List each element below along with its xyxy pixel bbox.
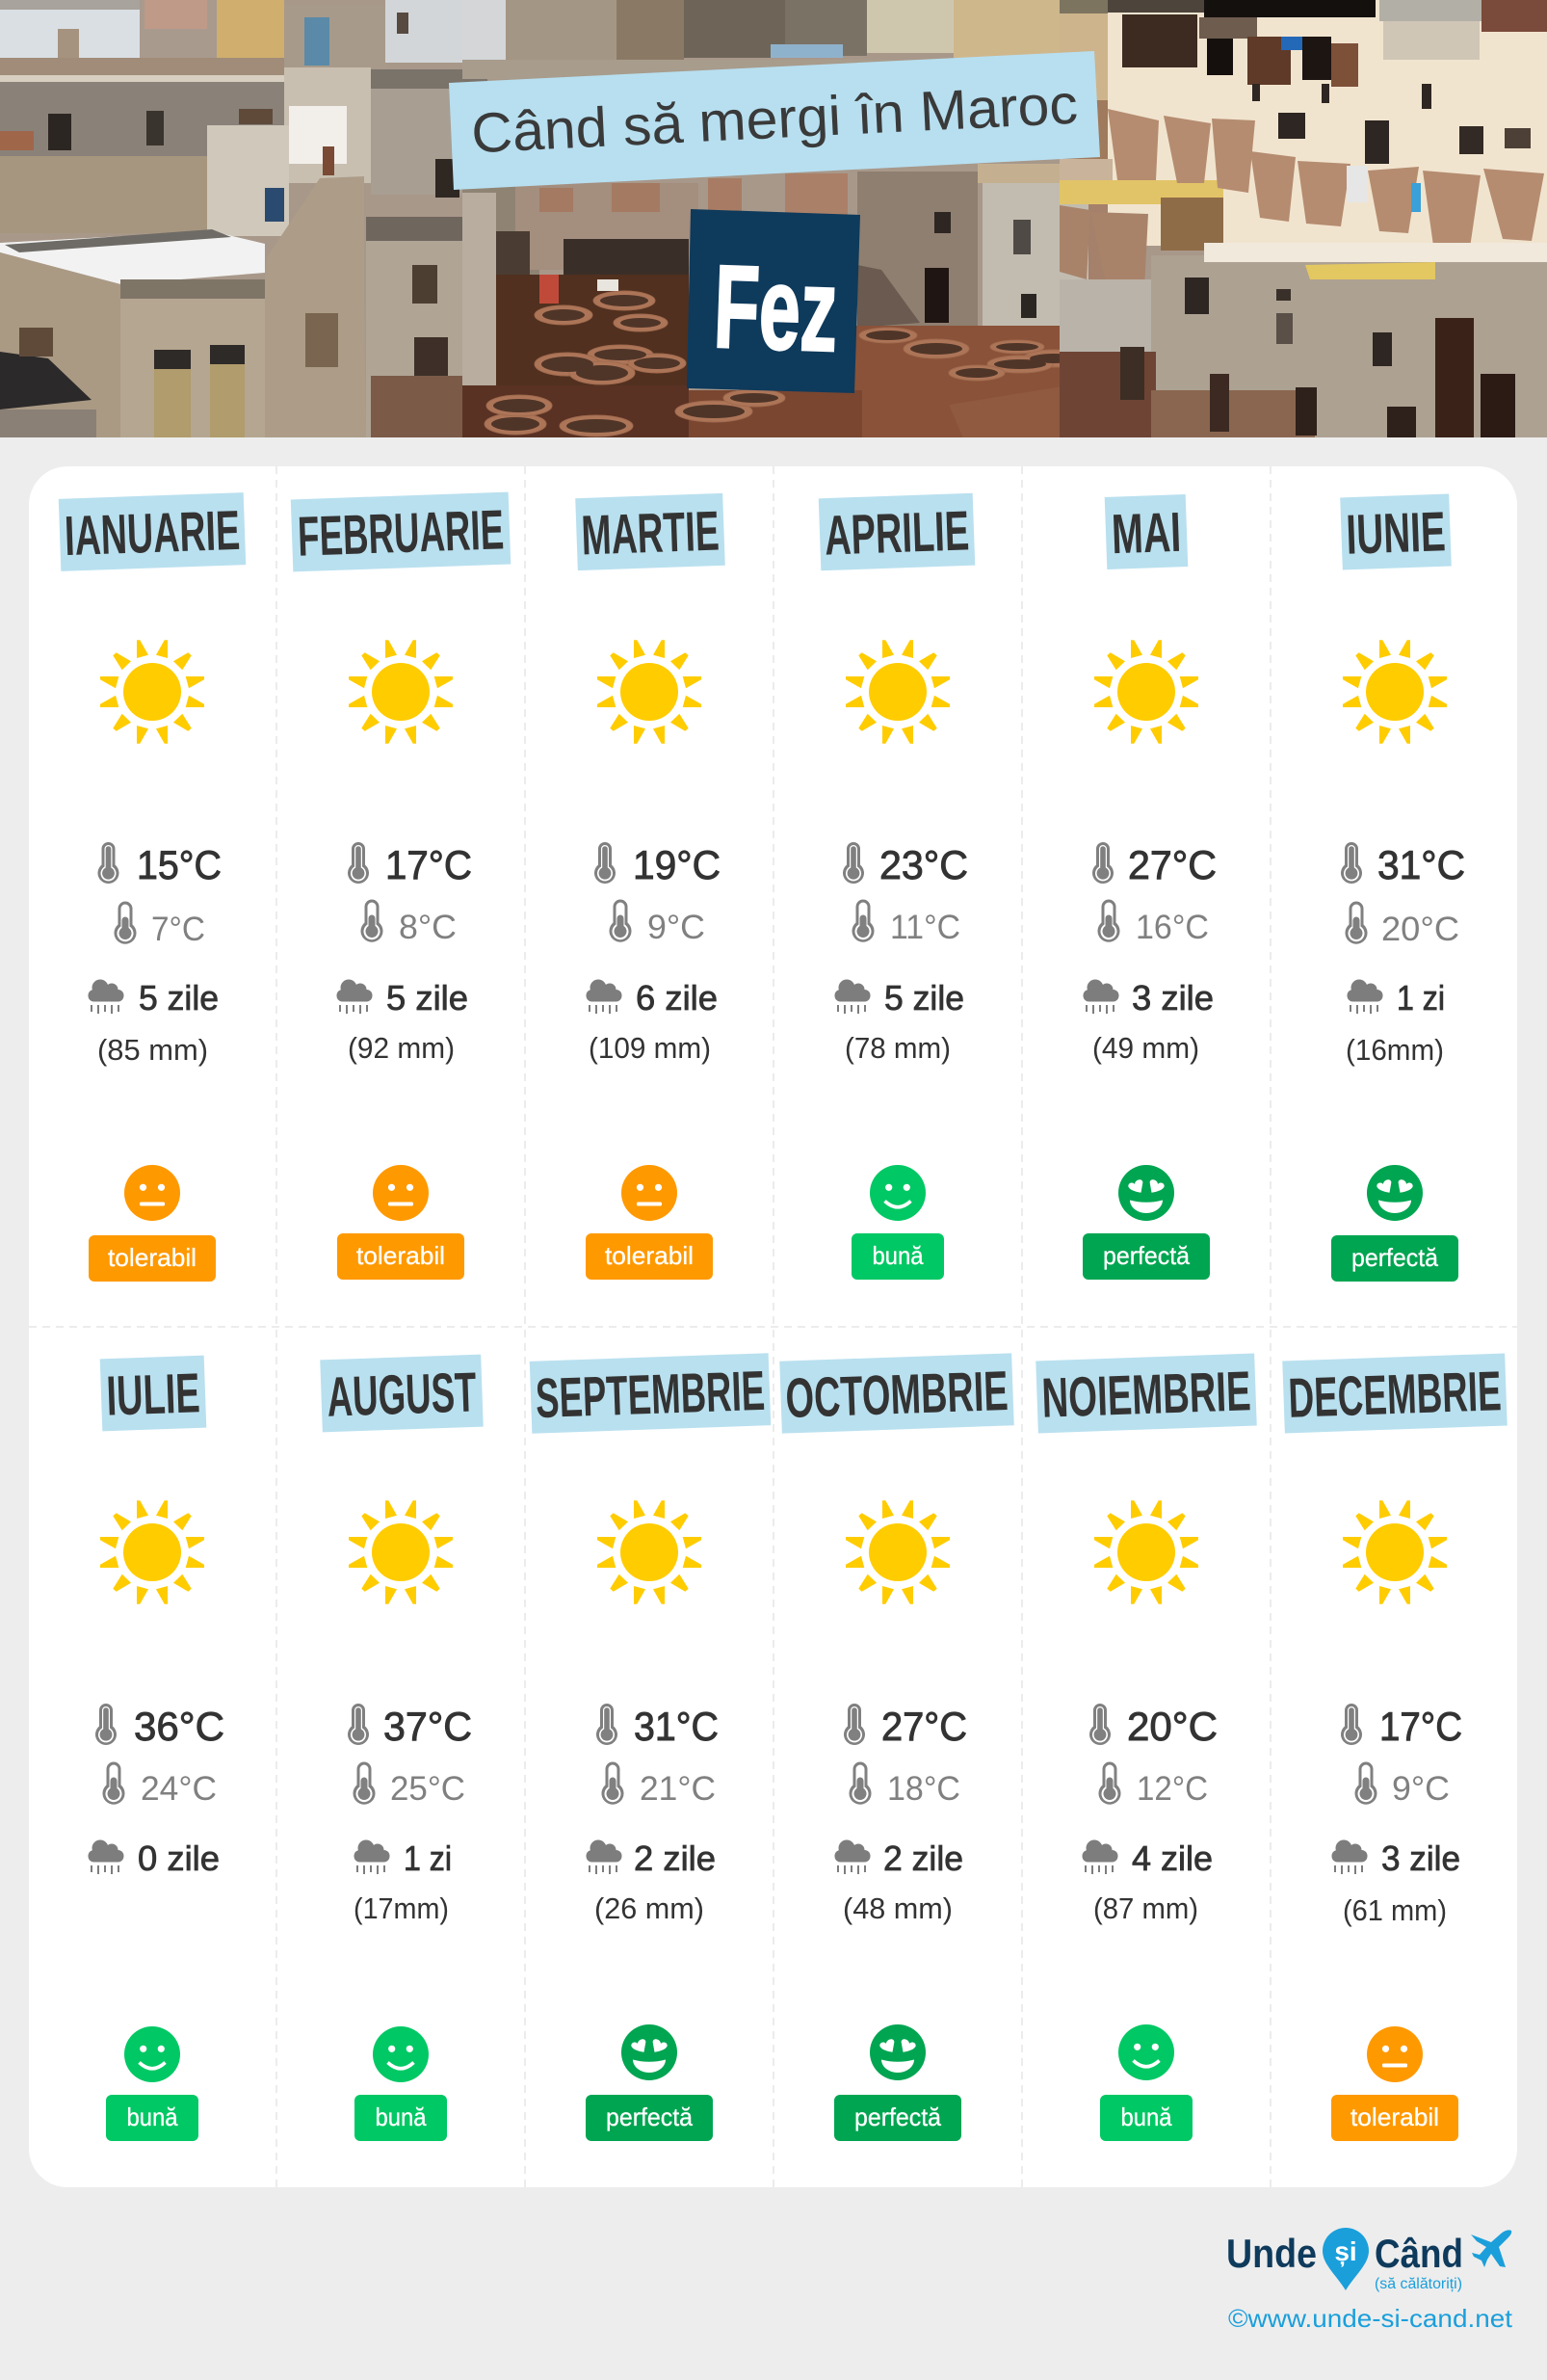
icon: thermometer max xyxy=(1092,842,1114,884)
rainfall: (26 mm) xyxy=(594,1891,704,1925)
icon: smile face xyxy=(870,1165,926,1221)
heading: MARTIE xyxy=(580,500,721,567)
icon: neutral face xyxy=(124,1165,180,1221)
rating badge xyxy=(586,1233,713,1280)
min temperature: 11°C xyxy=(890,909,960,946)
heading xyxy=(1105,494,1188,569)
max temperature: 37°C xyxy=(383,1704,472,1749)
website url: ©www.unde-si-cand.net xyxy=(1228,2304,1513,2333)
max temperature: 27°C xyxy=(1128,842,1217,887)
icon: sun xyxy=(1094,640,1198,744)
icon: sun xyxy=(100,1500,204,1604)
icon: thermometer max xyxy=(98,842,119,884)
photo right: hanging hides xyxy=(1060,0,1547,438)
heading xyxy=(1036,1354,1257,1433)
max temperature: 19°C xyxy=(633,842,721,887)
photo middle: dye vats xyxy=(462,0,1108,438)
icon: sun xyxy=(1094,1500,1198,1604)
rainy days: 5 zile xyxy=(884,978,964,1018)
icon: sun xyxy=(1343,640,1447,744)
icon: airplane xyxy=(1471,2230,1511,2267)
month: septembrie xyxy=(530,1353,771,2141)
icon: thermometer min xyxy=(1345,902,1368,944)
rating badge xyxy=(337,1233,464,1280)
icon: rain xyxy=(89,1840,123,1874)
month: iunie xyxy=(1331,494,1465,1282)
city label: Fez xyxy=(687,209,860,393)
month: noiembrie xyxy=(1036,1354,1257,2141)
city label: Fez: Fez xyxy=(712,241,840,376)
icon: thermometer min xyxy=(852,900,875,942)
heading: NOIEMBRIE xyxy=(1040,1360,1252,1430)
rating badge: tolerabil xyxy=(1350,2102,1439,2131)
rating badge xyxy=(106,2095,198,2141)
icon: rain xyxy=(586,979,622,1014)
month: iulie xyxy=(89,1356,224,2141)
logo word: Unde: Unde xyxy=(1226,2231,1317,2276)
photo: Fez tanneries xyxy=(0,0,1547,438)
rating badge: tolerabil xyxy=(108,1243,197,1272)
icon: thermometer max xyxy=(843,842,864,884)
icon: thermometer max xyxy=(844,1704,865,1745)
heading: SEPTEMBRIE xyxy=(535,1360,766,1430)
rainfall: (109 mm) xyxy=(589,1031,711,1065)
icon: smile face xyxy=(1118,2024,1174,2080)
rating badge: perfectă xyxy=(606,2102,694,2131)
icon: thermometer max xyxy=(1089,1704,1111,1745)
max temperature: 17°C xyxy=(1379,1704,1462,1749)
max temperature: 31°C xyxy=(634,1704,719,1749)
max temperature: 20°C xyxy=(1127,1704,1218,1749)
month: octombrie xyxy=(779,1353,1014,2141)
icon: thermometer max xyxy=(348,842,369,884)
rating badge xyxy=(354,2095,447,2141)
heading xyxy=(575,493,725,570)
icon: sun xyxy=(100,640,204,744)
heading: IULIE xyxy=(105,1362,201,1428)
icon: thermometer min xyxy=(360,900,383,942)
max temperature: 31°C xyxy=(1377,842,1465,887)
rainy days: 3 zile xyxy=(1132,978,1214,1018)
min temperature: 9°C xyxy=(647,909,705,946)
icon: sun xyxy=(1343,1500,1447,1604)
icon: thermometer min xyxy=(1098,1761,1121,1805)
icon: love face xyxy=(1367,1165,1423,1221)
icon: thermometer min xyxy=(850,1761,871,1805)
icon: rain xyxy=(1347,979,1383,1014)
min temperature: 24°C xyxy=(141,1770,217,1808)
rating badge xyxy=(1331,1235,1458,1282)
heading xyxy=(100,1356,206,1431)
photo left buildings xyxy=(0,0,487,438)
rainfall: (17mm) xyxy=(354,1891,449,1925)
icon: smile face xyxy=(124,2026,180,2082)
min temperature: 8°C xyxy=(399,909,457,946)
icon: rain xyxy=(586,1840,622,1874)
icon: map pin with și: și xyxy=(1334,2236,1357,2266)
rainfall: (78 mm) xyxy=(845,1031,951,1065)
icon: thermometer max xyxy=(348,1704,369,1745)
icon: thermometer min xyxy=(609,900,632,942)
month: mai xyxy=(1083,494,1217,1280)
logo: Unde și Când xyxy=(1226,2228,1511,2292)
icon: rain xyxy=(834,979,871,1014)
icon: thermometer min xyxy=(353,1761,376,1805)
icon: smile face xyxy=(373,2026,429,2082)
icon: rain xyxy=(1083,979,1119,1014)
icon: map pin with și xyxy=(1323,2228,1369,2290)
rating badge: perfectă xyxy=(1103,1241,1191,1270)
icon: love face xyxy=(1118,1165,1174,1221)
rainy days: 3 zile xyxy=(1381,1838,1460,1878)
heading xyxy=(291,492,511,571)
rainfall: (92 mm) xyxy=(348,1031,455,1065)
icon: sun xyxy=(846,1500,950,1604)
rating badge xyxy=(1083,1233,1210,1280)
heading: AUGUST xyxy=(326,1361,478,1429)
icon: sun xyxy=(349,1500,453,1604)
rating badge xyxy=(586,2095,713,2141)
max temperature: 23°C xyxy=(879,842,968,887)
rating badge: bună xyxy=(376,2102,427,2131)
max temperature: 15°C xyxy=(137,842,222,887)
heading xyxy=(530,1353,771,1434)
title banner: Când să mergi în Maroc xyxy=(470,73,1079,165)
min temperature: 21°C xyxy=(640,1770,716,1808)
heading: OCTOMBRIE xyxy=(784,1360,1009,1430)
rating badge: perfectă xyxy=(854,2102,942,2131)
rainfall: (87 mm) xyxy=(1093,1891,1198,1925)
icon: rain xyxy=(337,979,372,1014)
icon: thermometer max xyxy=(1341,842,1362,884)
icon: thermometer max xyxy=(95,1704,117,1745)
rating badge: tolerabil xyxy=(356,1241,445,1270)
rainy days: 2 zile xyxy=(883,1838,963,1878)
rating badge xyxy=(834,2095,961,2141)
icon: thermometer min xyxy=(601,1761,624,1805)
min temperature: 7°C xyxy=(151,911,205,948)
rating badge xyxy=(852,1233,944,1280)
month: martie xyxy=(575,493,725,1280)
heading: MAI xyxy=(1111,501,1182,566)
rainy days: 1 zi xyxy=(404,1838,452,1878)
month: februarie xyxy=(291,492,511,1280)
icon: thermometer max xyxy=(596,1704,617,1745)
rainy days: 0 zile xyxy=(138,1838,220,1878)
min temperature: 16°C xyxy=(1136,909,1209,946)
icon: sun xyxy=(349,640,453,744)
icon: rain xyxy=(89,979,123,1014)
rainfall: (85 mm) xyxy=(97,1033,208,1067)
logo subtitle: (să călătoriți) xyxy=(1375,2276,1462,2292)
heading: IUNIE xyxy=(1345,500,1447,567)
icon: thermometer max xyxy=(594,842,616,884)
rating badge: tolerabil xyxy=(605,1241,694,1270)
min temperature: 25°C xyxy=(390,1770,465,1808)
rating badge: bună xyxy=(127,2102,178,2131)
month: decembrie xyxy=(1282,1353,1508,2141)
icon: thermometer min xyxy=(102,1761,125,1805)
icon: rain xyxy=(1331,1840,1368,1874)
heading xyxy=(320,1355,484,1432)
min temperature: 12°C xyxy=(1137,1770,1208,1808)
rainfall: (61 mm) xyxy=(1343,1893,1447,1927)
icon: love face xyxy=(870,2024,926,2080)
rating badge: perfectă xyxy=(1351,1243,1439,1272)
icon: thermometer min xyxy=(114,902,137,944)
card panel xyxy=(29,466,1517,2187)
max temperature: 17°C xyxy=(385,842,472,887)
heading: IANUARIE xyxy=(64,499,241,568)
icon: thermometer min xyxy=(1098,900,1119,942)
icon: neutral face xyxy=(373,1165,429,1221)
rating badge: bună xyxy=(873,1241,924,1270)
month: aprilie xyxy=(819,493,975,1280)
max temperature: 27°C xyxy=(881,1704,967,1749)
heading: APRILIE xyxy=(824,499,970,568)
min temperature: 20°C xyxy=(1381,911,1459,948)
icon: rain xyxy=(1083,1840,1117,1874)
rainy days: 5 zile xyxy=(386,978,468,1018)
rainy days: 6 zile xyxy=(636,978,718,1018)
icon: rain xyxy=(354,1840,389,1874)
icon: thermometer max xyxy=(1341,1704,1362,1745)
rainfall: (49 mm) xyxy=(1092,1031,1199,1065)
icon: sun xyxy=(846,640,950,744)
rainy days: 2 zile xyxy=(634,1838,716,1878)
rainfall: (16mm) xyxy=(1346,1033,1444,1067)
heading xyxy=(819,493,975,570)
icon: sun xyxy=(597,640,701,744)
icon: love face xyxy=(621,2024,677,2080)
min temperature: 18°C xyxy=(887,1770,960,1808)
heading: FEBRUARIE xyxy=(297,498,505,569)
heading xyxy=(59,492,246,571)
heading xyxy=(779,1353,1014,1434)
icon: neutral face xyxy=(1367,2026,1423,2082)
max temperature: 36°C xyxy=(134,1704,224,1749)
rainfall: (48 mm) xyxy=(843,1891,953,1925)
rainy days: 4 zile xyxy=(1132,1838,1213,1878)
min temperature: 9°C xyxy=(1392,1770,1450,1808)
logo word: Când: Când xyxy=(1375,2231,1463,2276)
rating badge: bună xyxy=(1121,2102,1172,2131)
rating badge xyxy=(89,1235,216,1282)
icon: thermometer min xyxy=(1354,1761,1377,1805)
icon: sun xyxy=(597,1500,701,1604)
rating badge xyxy=(1100,2095,1193,2141)
icon: rain xyxy=(834,1840,871,1874)
title banner xyxy=(449,51,1100,190)
rainy days: 1 zi xyxy=(1397,978,1445,1018)
rating badge xyxy=(1331,2095,1458,2141)
month: august xyxy=(320,1355,484,2141)
heading xyxy=(1340,494,1452,569)
icon: neutral face xyxy=(621,1165,677,1221)
rainy days: 5 zile xyxy=(139,978,219,1018)
month: ianuarie xyxy=(59,492,246,1282)
